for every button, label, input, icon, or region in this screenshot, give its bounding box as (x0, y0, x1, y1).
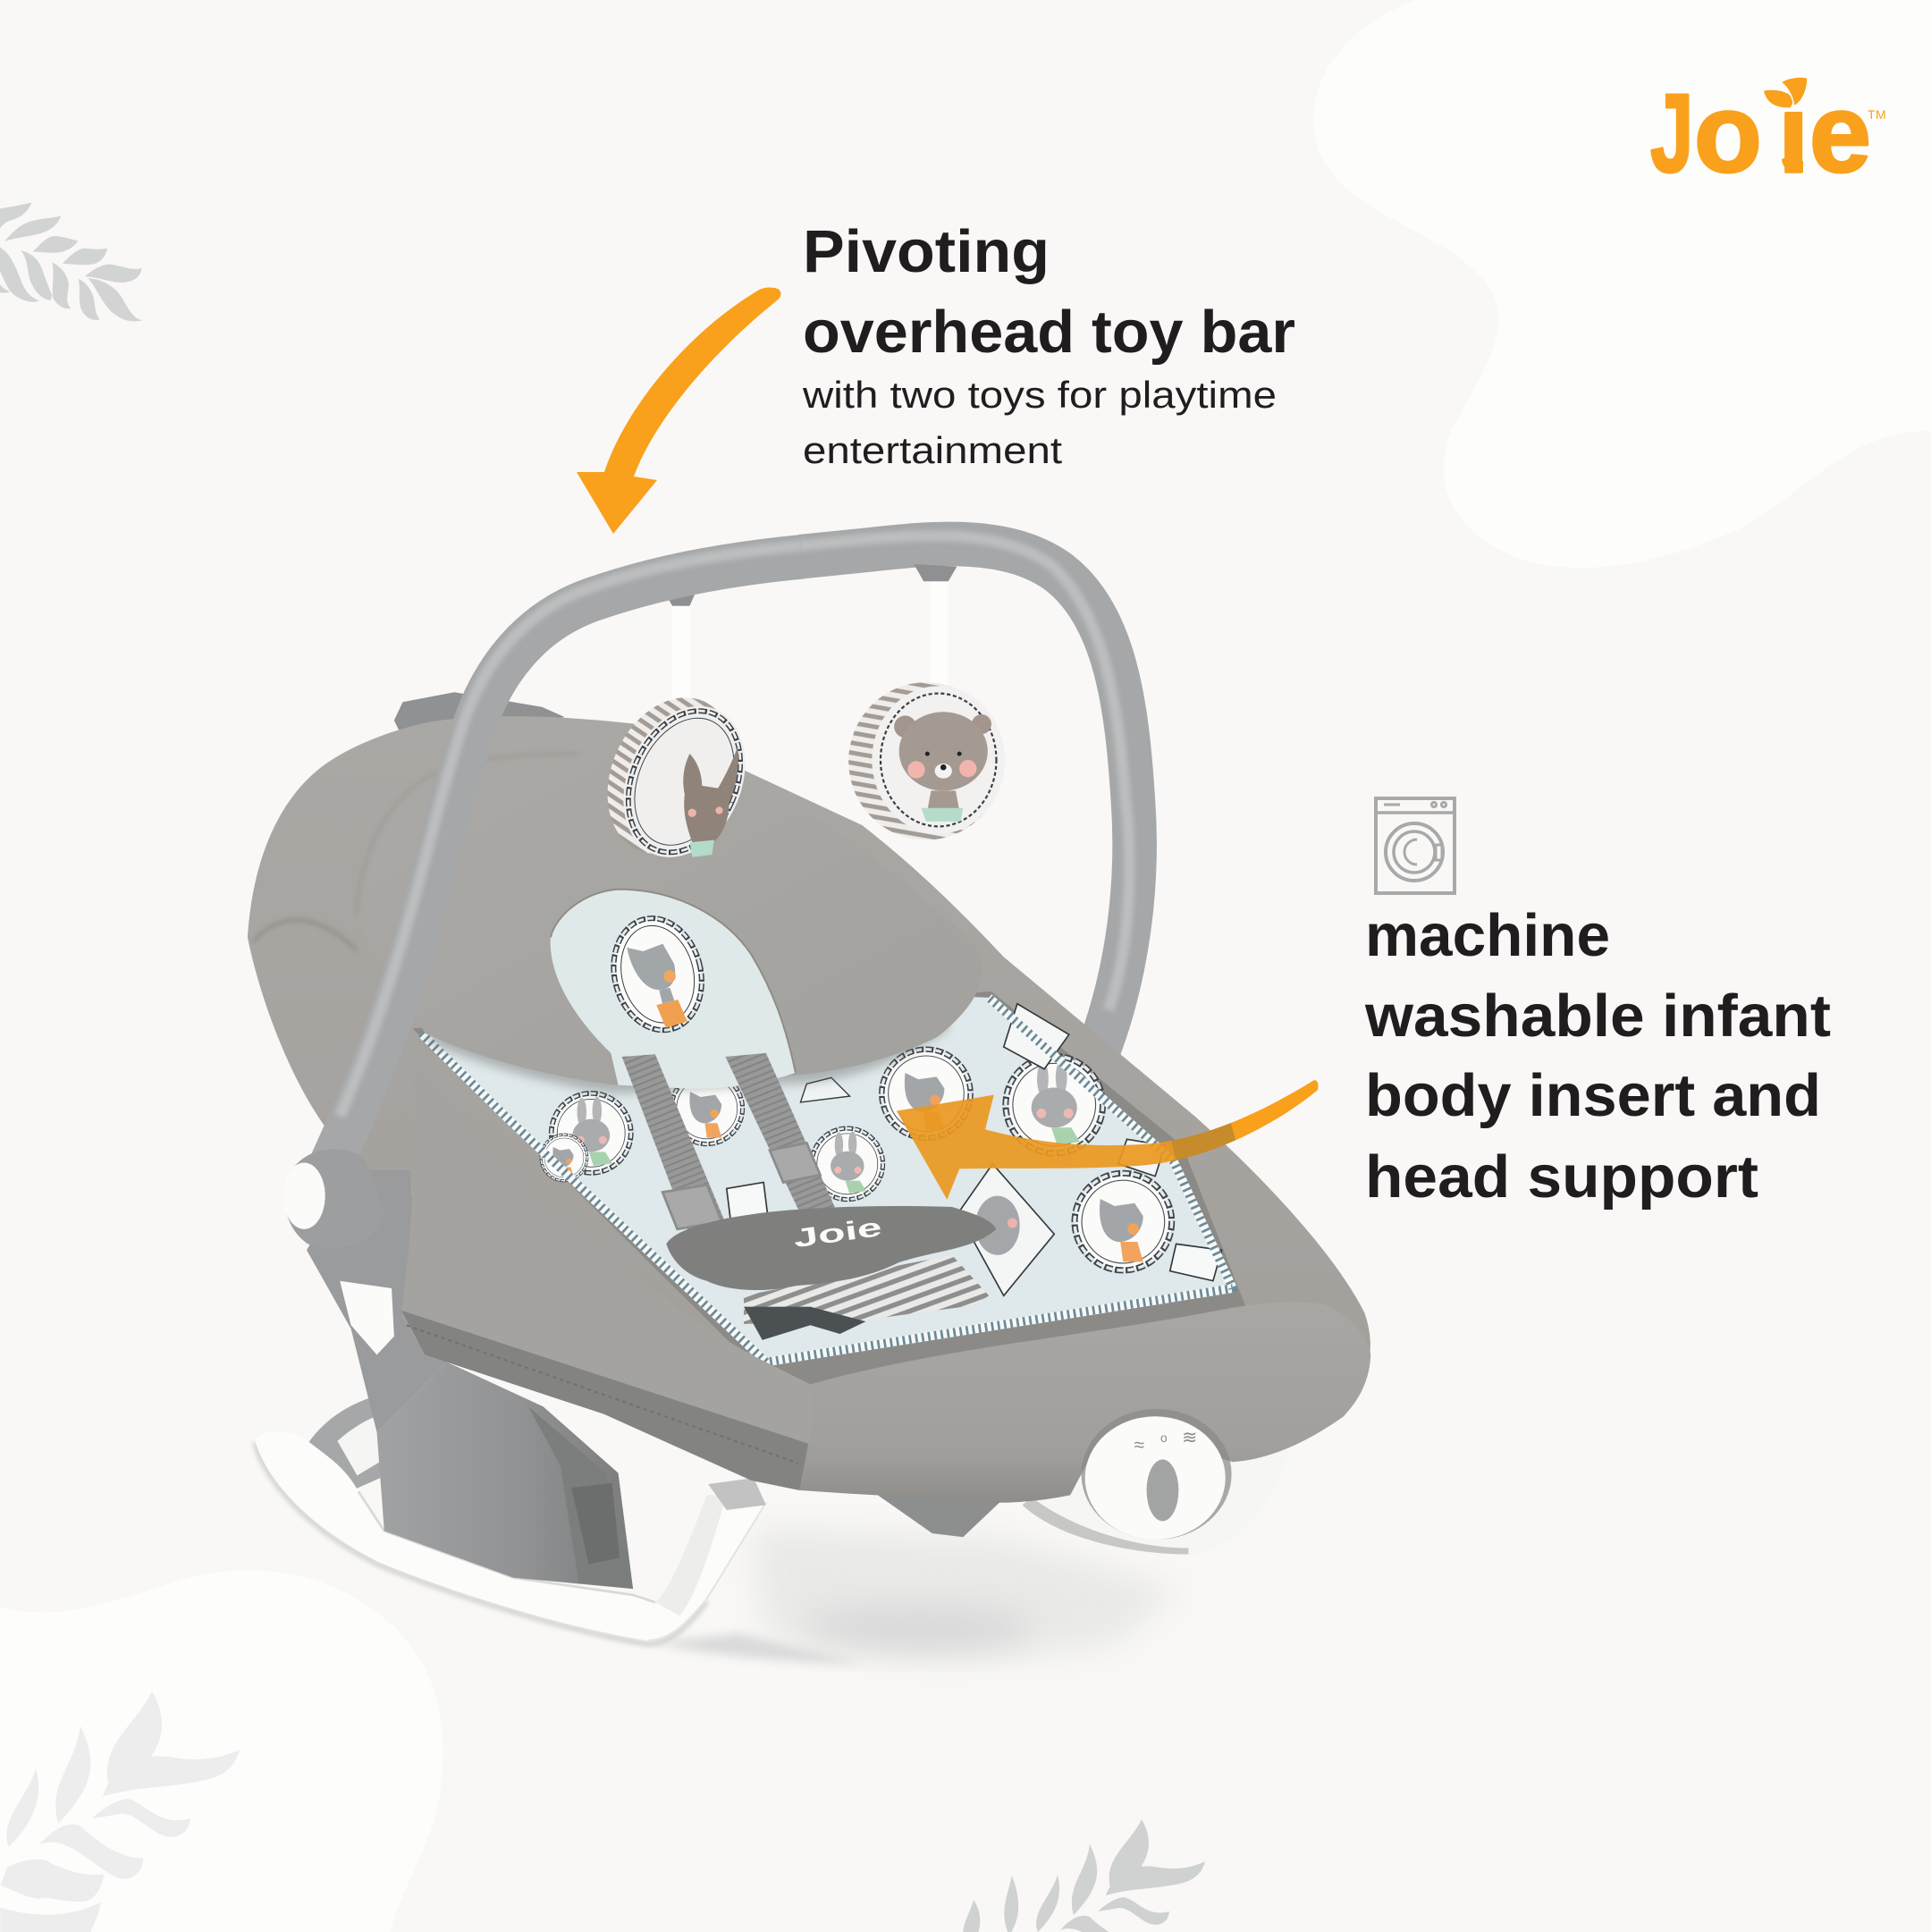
callout: pivoting overhead toy bar: entertainment (803, 429, 1062, 471)
underside seam strip (401, 1311, 813, 1490)
left side panel of seat (401, 1059, 813, 1444)
callout: machine washable (1364, 902, 1831, 1211)
shoulder straps and buckles (622, 1053, 838, 1242)
side latch (340, 1281, 394, 1354)
crotch pad with logo (666, 1206, 996, 1290)
callout: machine washable: head support (1365, 1143, 1758, 1211)
callout: machine washable: machine (1365, 902, 1610, 969)
logo i foot (1782, 154, 1803, 173)
vibration dial: ≋ (1182, 1428, 1197, 1448)
overhead bar: right leg (800, 536, 1134, 1047)
hanging straps and clips (664, 564, 957, 712)
toy: bunny (584, 678, 769, 879)
plastic headrest cap (394, 692, 564, 751)
logo leaves (1763, 77, 1810, 110)
body insert (421, 985, 1233, 1363)
callout: machine washable: body insert and (1365, 1062, 1821, 1129)
bouncer chair illustration (248, 536, 1370, 1663)
background blob: top right (1313, 0, 1931, 568)
seam line (407, 1325, 798, 1464)
right rear frame and base (708, 1429, 1291, 1555)
arrow: to insert (897, 1080, 1319, 1200)
vibration dial (1082, 1409, 1232, 1540)
back shell shadow fold (252, 920, 358, 951)
icon: washing machine (1376, 798, 1455, 893)
strap buckle on column (571, 1483, 620, 1565)
heading: Pivoting (803, 218, 1050, 285)
bunny figure (683, 747, 738, 845)
vibration dial: o (1160, 1431, 1168, 1445)
striped fabric under pad (744, 1255, 989, 1340)
overhead bar: left arm (323, 545, 803, 1182)
rocker base frame (255, 1392, 766, 1644)
cushion outline shading (358, 754, 578, 914)
seat well (412, 991, 1246, 1392)
leaf branch: top left (0, 203, 142, 321)
toy: bear (848, 682, 1005, 840)
background blob: bottom left (0, 1570, 443, 1932)
dial slider (1147, 1459, 1178, 1521)
decorative animal medallions (541, 1004, 1222, 1295)
support column and side plastic (307, 1152, 633, 1589)
subtext: with two toys for playtime (802, 374, 1277, 416)
arrow: to toy bar (577, 288, 781, 534)
logo: Joie (1650, 72, 1886, 196)
trademark: TM (1868, 107, 1886, 122)
floor shadow (653, 1527, 1182, 1663)
head panel with medallion (551, 890, 796, 1089)
piped edge of insert (421, 998, 1233, 1363)
seat shell fabric (248, 716, 1370, 1478)
callout: pivoting overhead toy bar: overhead toy bar (803, 299, 1295, 366)
cushion drop shadow (425, 985, 949, 1093)
logo letter J: J (1650, 72, 1693, 196)
leaf branch: bottom left (0, 1692, 240, 1932)
pivot hub (283, 1149, 384, 1249)
dial symbols: ≈ (1134, 1435, 1144, 1455)
callout: machine washable: washable infant (1364, 983, 1831, 1050)
medallion: cat (603, 909, 713, 1040)
callout: pivoting overhead toy bar (802, 218, 1295, 471)
head support cushion (358, 754, 982, 1085)
Joie embroidered mark: Joie (792, 1213, 883, 1253)
front lip of seat (799, 1302, 1370, 1503)
logo letters oie: oie (1694, 72, 1871, 196)
leaf branch: bottom centre (963, 1819, 1205, 1932)
